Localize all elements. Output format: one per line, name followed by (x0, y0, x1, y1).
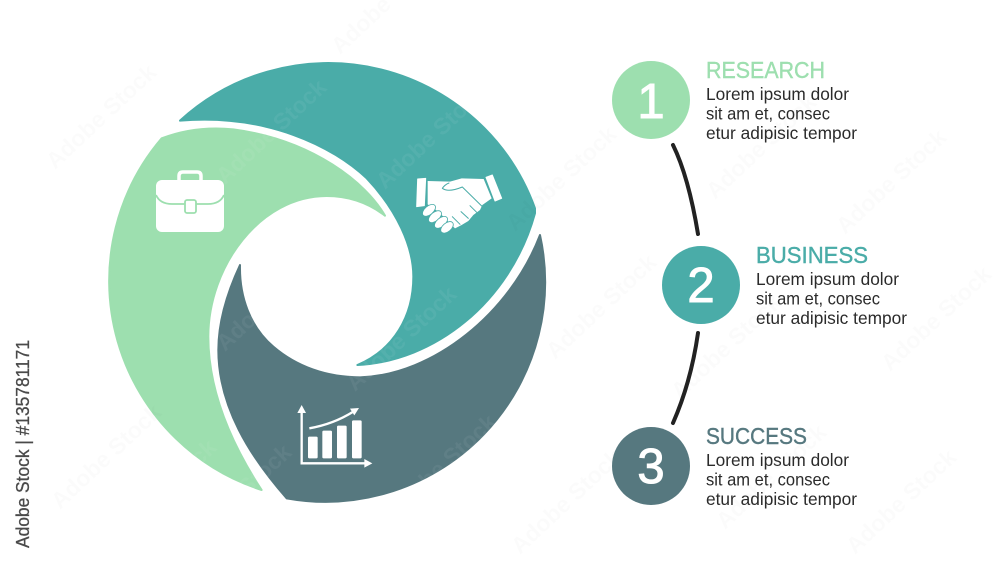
faint stock watermarks: Adobe Stock (41, 59, 161, 174)
faint stock watermarks: Adobe Stock (841, 444, 961, 559)
faint stock watermarks: Adobe Stock (341, 281, 461, 396)
text block: business: etur adipisic tempor (756, 308, 907, 328)
faint stock watermarks: Adobe Stock (506, 444, 626, 559)
step 1 badge: 1 (637, 75, 665, 129)
text block: success: SUCCESS (706, 423, 807, 449)
faint stock watermarks: Adobe Stock (211, 241, 331, 356)
faint stock watermarks: Adobe Stock (46, 399, 166, 514)
text block: business (756, 242, 907, 328)
faint stock watermarks: Adobe Stock (211, 74, 331, 189)
text block: success: Lorem ipsum dolor (706, 450, 849, 470)
faint stock watermarks: Adobe Stock (371, 79, 491, 194)
faint stock watermarks: Adobe Stock (541, 249, 661, 364)
faint stock watermarks: Adobe Stock (176, 439, 296, 554)
icon: growth chart (297, 405, 372, 468)
faint stock watermarks: Adobe Stock (381, 409, 501, 524)
stock credit: Adobe Stock | #135781171 (13, 340, 33, 548)
text block: business: Lorem ipsum dolor (756, 269, 899, 289)
text block: research (706, 57, 857, 143)
text block: research: sit am et, consec (706, 104, 830, 124)
segment: research (green) (109, 128, 385, 490)
connector: step 2 to 3 (673, 333, 698, 423)
step 3 badge: 3 (637, 440, 665, 494)
icon: handshake (417, 175, 502, 235)
text block: success: etur adipisic tempor (706, 489, 857, 509)
text block: success: sit am et, consec (706, 470, 830, 490)
icon: briefcase (156, 172, 224, 232)
circular diagram (109, 63, 545, 502)
segment: business (teal) (180, 63, 535, 365)
step 2 badge (662, 246, 740, 324)
faint stock watermarks: Adobe Stock (701, 89, 821, 204)
step 3 badge (612, 427, 690, 505)
text block: research: Lorem ipsum dolor (706, 84, 849, 104)
faint stock watermarks: Adobe Stock (711, 419, 831, 534)
faint stock watermarks: Adobe Stock (501, 121, 621, 236)
text block: business: BUSINESS (756, 242, 868, 268)
faint stock watermarks: Adobe Stock (876, 261, 996, 376)
text block: success (706, 423, 857, 509)
text block: research: RESEARCH (706, 57, 825, 83)
faint stock watermarks: Adobe Stock (831, 124, 951, 239)
faint stock watermarks: Adobe Stock (101, 434, 221, 549)
segment: success (slate) (218, 235, 545, 502)
step 1 badge (612, 61, 690, 139)
connector: step 1 to 2 (673, 145, 698, 234)
text block: business: sit am et, consec (756, 288, 880, 308)
faint stock watermarks: Adobe Stock (666, 289, 786, 404)
text block: research: etur adipisic tempor (706, 123, 857, 143)
step 2 badge: 2 (687, 259, 715, 313)
